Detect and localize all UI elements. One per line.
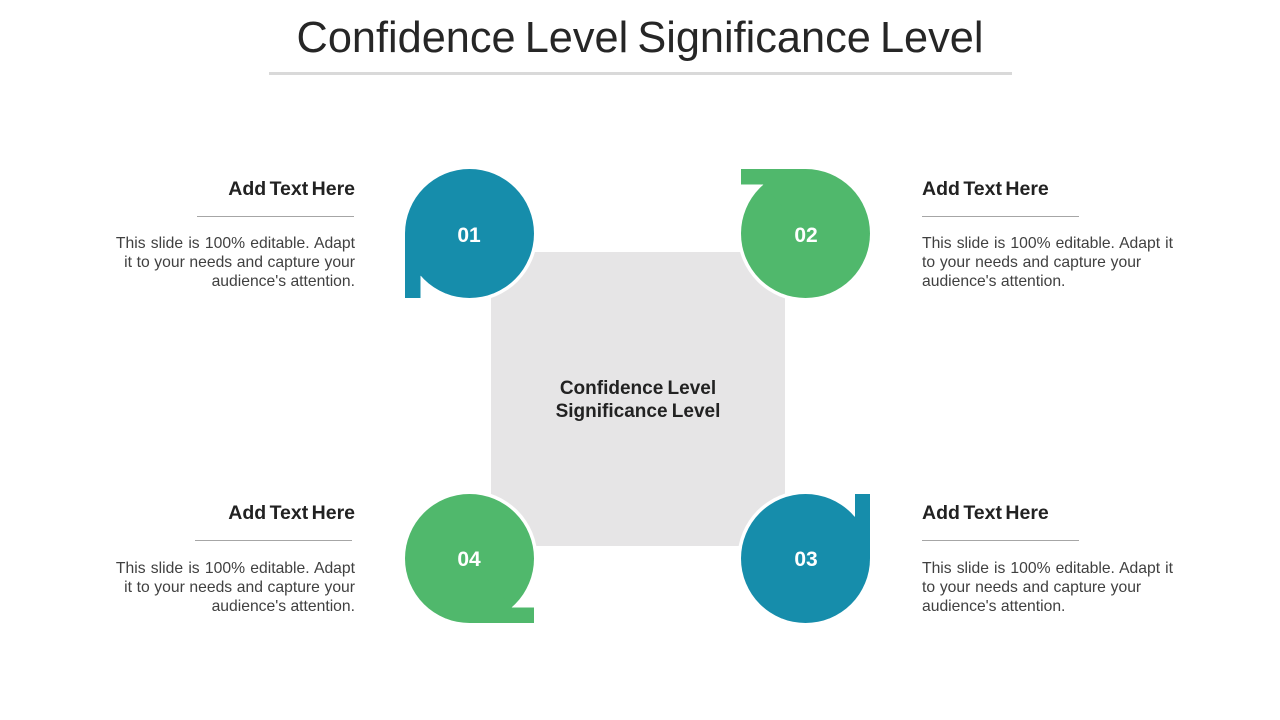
circle 03: 03 (794, 548, 818, 571)
body 02: audience's attention. (922, 273, 1065, 290)
center square panel (491, 252, 785, 546)
body 03: This slide is 100% editable. Adapt it (922, 560, 1173, 577)
body 02: This slide is 100% editable. Adapt it (922, 235, 1173, 252)
title: Confidence Level Significance Level (297, 14, 983, 62)
heading 01: Add Text Here (228, 178, 355, 200)
body 02 (922, 235, 1173, 290)
divider 03 (922, 540, 1079, 541)
circle 02 (738, 166, 874, 302)
body 03: audience's attention. (922, 598, 1065, 615)
heading 04: Add Text Here (228, 502, 355, 524)
heading 02: Add Text Here (922, 178, 1049, 200)
center label (556, 378, 720, 422)
divider 04 (195, 540, 352, 541)
body 04: it to your needs and capture your (124, 579, 355, 596)
body 03: to your needs and capture your (922, 579, 1141, 596)
divider 02 (922, 216, 1079, 217)
title underline (269, 72, 1012, 75)
body 04 (116, 560, 355, 615)
circle 04 (402, 490, 538, 626)
body 01: audience's attention. (212, 273, 355, 290)
body 03 (922, 560, 1173, 615)
circle 04: 04 (457, 548, 481, 571)
center label: Significance Level (556, 401, 720, 422)
text block 03 (922, 502, 1173, 615)
body 02: to your needs and capture your (922, 254, 1141, 271)
body 01: it to your needs and capture your (124, 254, 355, 271)
text block 01 (116, 178, 355, 290)
circle 02: 02 (794, 224, 818, 247)
divider 01 (197, 216, 354, 217)
body 04: audience's attention. (212, 598, 355, 615)
text block 02 (922, 178, 1173, 290)
center label: Confidence Level (560, 378, 716, 399)
circle 03 (738, 490, 874, 626)
circle 01: 01 (457, 224, 481, 247)
text block 04 (116, 502, 355, 615)
heading 03: Add Text Here (922, 502, 1049, 524)
circle 01 (402, 166, 538, 302)
body 01 (116, 235, 355, 290)
body 01: This slide is 100% editable. Adapt (116, 235, 355, 252)
body 04: This slide is 100% editable. Adapt (116, 560, 355, 577)
